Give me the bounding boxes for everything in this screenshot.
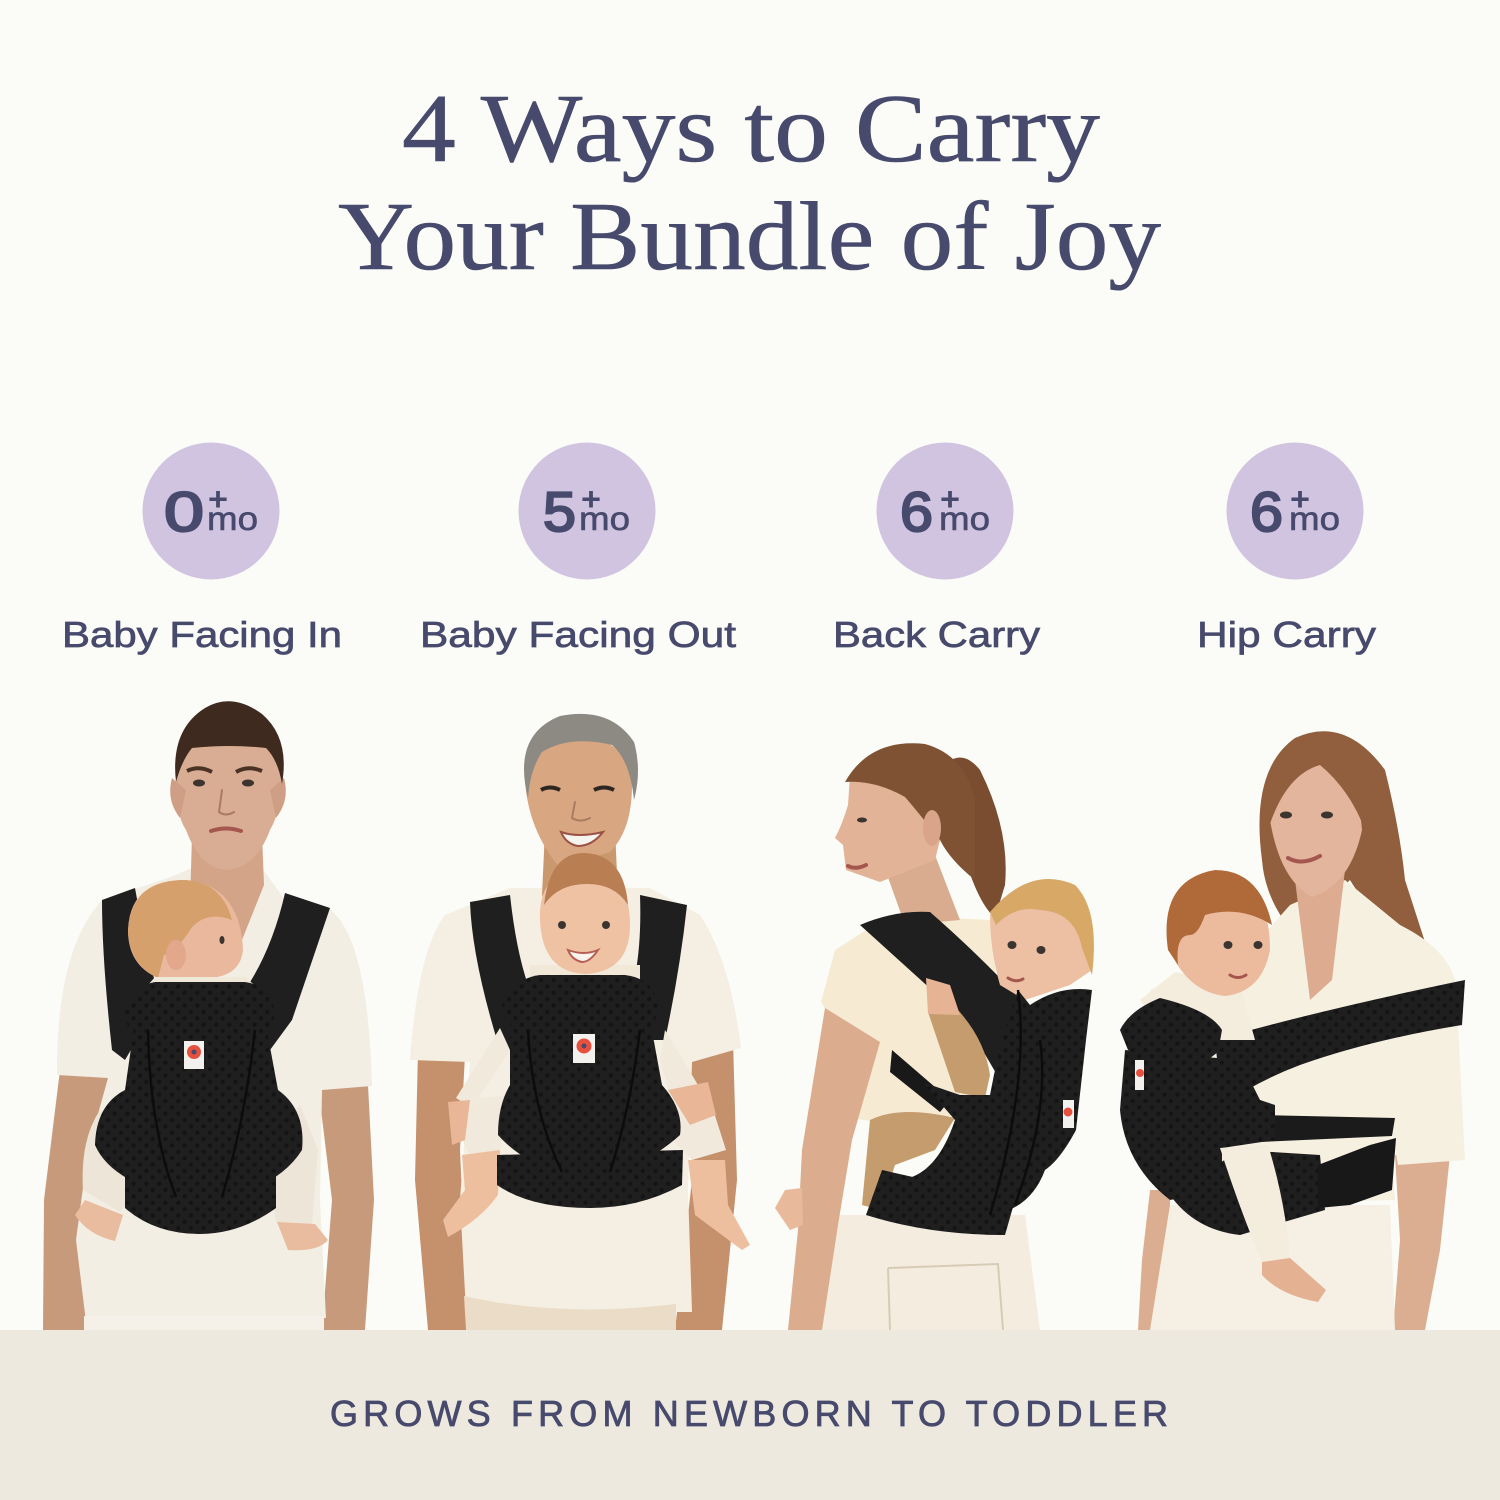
badge: 5+ months: 5 [543,480,576,543]
badge: 6+ months back: 6 [900,480,933,543]
badge: 6+ months hip: + [1290,481,1310,517]
baby hands [448,1082,716,1145]
woman shirt [818,915,1000,1121]
woman trousers [1150,1205,1395,1330]
baby eye [220,936,224,944]
woman neck [880,855,960,925]
figure: older man with baby facing out [410,714,750,1330]
carrier seams [990,990,1042,1215]
badge: 6+ months hip: mo [1289,500,1340,537]
baby head [540,868,630,974]
carrier waistband [125,1170,276,1234]
woman right arm [1393,1155,1450,1330]
carrier pouch [95,1020,302,1197]
man head [176,728,282,870]
baby tan arm [928,1010,990,1098]
man ears [170,778,286,818]
carrier waistband [497,1150,683,1208]
badge: 5+ months [518,442,656,580]
carrier hood [502,975,658,1026]
carrier hip belt [1170,1150,1325,1235]
man trousers [464,1296,676,1330]
label: hip carry: Hip Carry [1197,614,1376,655]
baby arms [456,1028,698,1108]
badge: 6+ months back [876,442,1014,580]
baby legs [83,1105,318,1225]
man nose and mouth [211,790,241,831]
ergobaby tag [1063,1100,1074,1128]
baby ear [166,940,186,970]
woman face [835,775,950,882]
woman face [1270,763,1362,897]
woman fringe [1267,750,1365,830]
trouser pocket [888,1264,1003,1330]
man eyes [541,788,614,790]
woman face details [1280,812,1333,862]
carrier pouch [895,989,1092,1215]
woman ear [923,810,941,846]
baby hair [1167,870,1272,965]
baby hair [544,853,628,905]
woman neck [1295,870,1345,1000]
carrier seams [148,1030,255,1197]
baby lower legs and feet [443,1150,750,1250]
title: 4 Ways to Carry [402,75,1100,183]
baby head [128,880,243,978]
baby foot [1262,1258,1326,1302]
man eyes [193,780,254,786]
carrier pouch [1120,1050,1275,1200]
ergobaby tag [573,1034,595,1063]
badge: 5+ months: + [581,481,601,517]
baby feet [75,1200,328,1250]
woman hair [845,743,975,880]
baby hair [128,880,232,978]
carrier strap over shoulder [860,912,1030,1080]
baby legs [460,1095,726,1160]
baby hair [990,879,1094,975]
baby tan leg [862,1112,955,1210]
baby head [1171,878,1270,996]
carrier pouch [498,1020,681,1175]
carrier straps [102,888,330,1060]
woman left arm [1138,1190,1170,1330]
man shirt [57,868,372,1322]
carrier seams [528,1030,640,1172]
man nose [572,802,590,820]
man neck [542,830,618,920]
man neck [190,835,264,945]
footer text: GROWS FROM NEWBORN TO TODDLER [330,1393,1168,1434]
man arms [43,1070,374,1330]
badge: 6+ months hip: 6 [1250,480,1283,543]
woman sweater [1150,880,1465,1205]
badge: 0+ months: 0 [164,480,204,543]
carrier buckle [1318,1138,1396,1208]
woman hair back [1259,731,1425,942]
man hair [524,714,638,800]
man arms [415,1040,737,1330]
carrier hood [125,982,275,1031]
figure: woman with hip carry [1120,731,1465,1330]
baby body [1140,972,1255,1040]
baby head [990,883,1093,1000]
carrier side strap [890,1050,950,1112]
ergobaby tag [184,1041,204,1069]
carrier hood [1120,998,1222,1062]
label: baby facing out: Baby Facing Out [420,614,736,655]
carrier waistband [866,1170,1015,1235]
baby hand [926,978,960,1015]
badge: 0+ months: + [208,481,228,517]
carrier strap across body [1215,980,1465,1105]
badge: 6+ months hip [1226,442,1364,580]
badge: 0+ months [142,442,280,580]
badge: 6+ months back: mo [939,500,990,537]
baby face [1224,941,1262,978]
baby leg [1220,1145,1290,1262]
woman arm [788,1008,880,1330]
label: baby facing in: Baby Facing In [62,614,342,655]
title [338,75,1161,291]
man brows [187,768,262,772]
liner [530,965,640,981]
badge: 6+ months back: + [940,481,960,517]
woman eye and mouth [848,818,867,868]
woman ponytail [940,758,1006,918]
ergobaby tag [1135,1060,1144,1090]
man hair [175,701,284,784]
baby face [558,921,610,962]
footer band [0,1330,1500,1500]
baby face [1008,941,1046,981]
badge: 5+ months: mo [579,500,630,537]
figure: woman with back carry [775,743,1094,1330]
title: Your Bundle of Joy [338,183,1161,291]
man shirt [410,888,741,1312]
man head [525,735,632,868]
man trousers [84,1316,324,1330]
carrier waist belt [1260,1115,1395,1142]
baby foot [775,1188,803,1230]
figure: man with baby facing in [43,701,374,1330]
man smile [561,832,603,846]
carrier straps [470,895,687,1050]
liner edge [148,977,258,988]
woman trousers [818,1215,1040,1330]
badge: 0+ months: mo [207,500,258,537]
label: back carry: Back Carry [833,614,1040,655]
